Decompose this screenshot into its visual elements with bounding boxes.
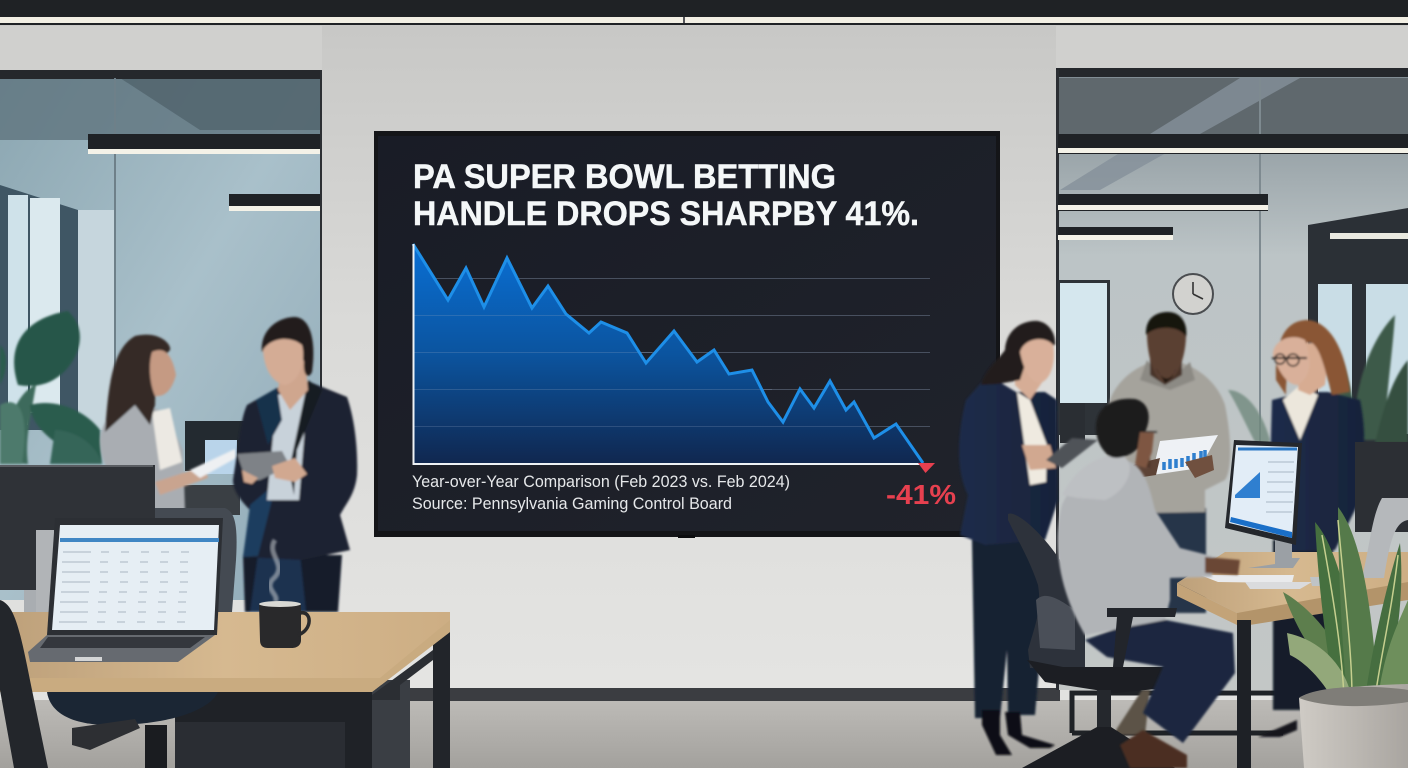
right background plants — [1228, 315, 1408, 455]
wall-mounted display screen — [374, 131, 1000, 538]
ceiling lamps left — [88, 134, 320, 154]
chart caption: Source: Pennsylvania Gaming Control Board — [412, 494, 732, 513]
laptop — [28, 518, 223, 662]
floor — [0, 700, 1408, 768]
right desk — [1177, 552, 1408, 768]
screen title: PA SUPER BOWL BETTING — [413, 158, 836, 196]
monitor rear — [0, 465, 155, 630]
screen title — [413, 158, 919, 233]
steam — [270, 540, 279, 602]
plant pot — [1299, 684, 1408, 768]
person: seated chair and standing man group — [959, 312, 1408, 768]
screen bezel — [374, 131, 1000, 537]
rear right monitor — [1355, 442, 1408, 578]
baseboard — [410, 687, 1060, 701]
person: woman with ponytail in navy blazer — [959, 321, 1098, 755]
area line chart — [413, 244, 935, 473]
person: woman with glasses in navy blazer — [1258, 320, 1364, 737]
red down marker — [918, 463, 935, 473]
left glass room — [0, 26, 322, 600]
screen title: HANDLE DROPS SHARPBY 41%. — [413, 195, 919, 233]
chart caption: Year-over-Year Comparison (Feb 2023 vs. Feb 2024) — [412, 472, 790, 491]
back windows right — [1308, 208, 1408, 450]
chair arm — [1107, 608, 1177, 667]
desktop monitor with chart — [1225, 440, 1302, 568]
change callout: -41% — [886, 479, 956, 510]
foreground office chair — [0, 600, 218, 768]
ceiling lamps right — [1058, 134, 1408, 154]
person: woman in grey cardigan — [100, 335, 236, 510]
ceiling light strip — [0, 0, 1408, 25]
plants behind glass: left monstera — [0, 311, 102, 464]
rear desk frame — [1072, 693, 1283, 733]
right glass room — [1056, 26, 1408, 733]
office chair for seated man — [1008, 513, 1200, 768]
wall clock — [1173, 274, 1213, 314]
chart caption — [412, 472, 790, 513]
person: woman in dark blazer with tablet — [233, 317, 357, 612]
person: seated man in grey hoodie — [1058, 399, 1240, 768]
snake plant — [1283, 507, 1408, 698]
desk legs and cabinet — [175, 626, 450, 768]
paper with blue bars — [1133, 435, 1218, 478]
left foreground desk setup — [0, 465, 450, 768]
coffee mug — [259, 601, 309, 648]
chair behind — [155, 508, 237, 612]
desk top — [0, 612, 450, 692]
back window — [1058, 280, 1110, 435]
person: standing man in hoodie — [1104, 312, 1230, 735]
